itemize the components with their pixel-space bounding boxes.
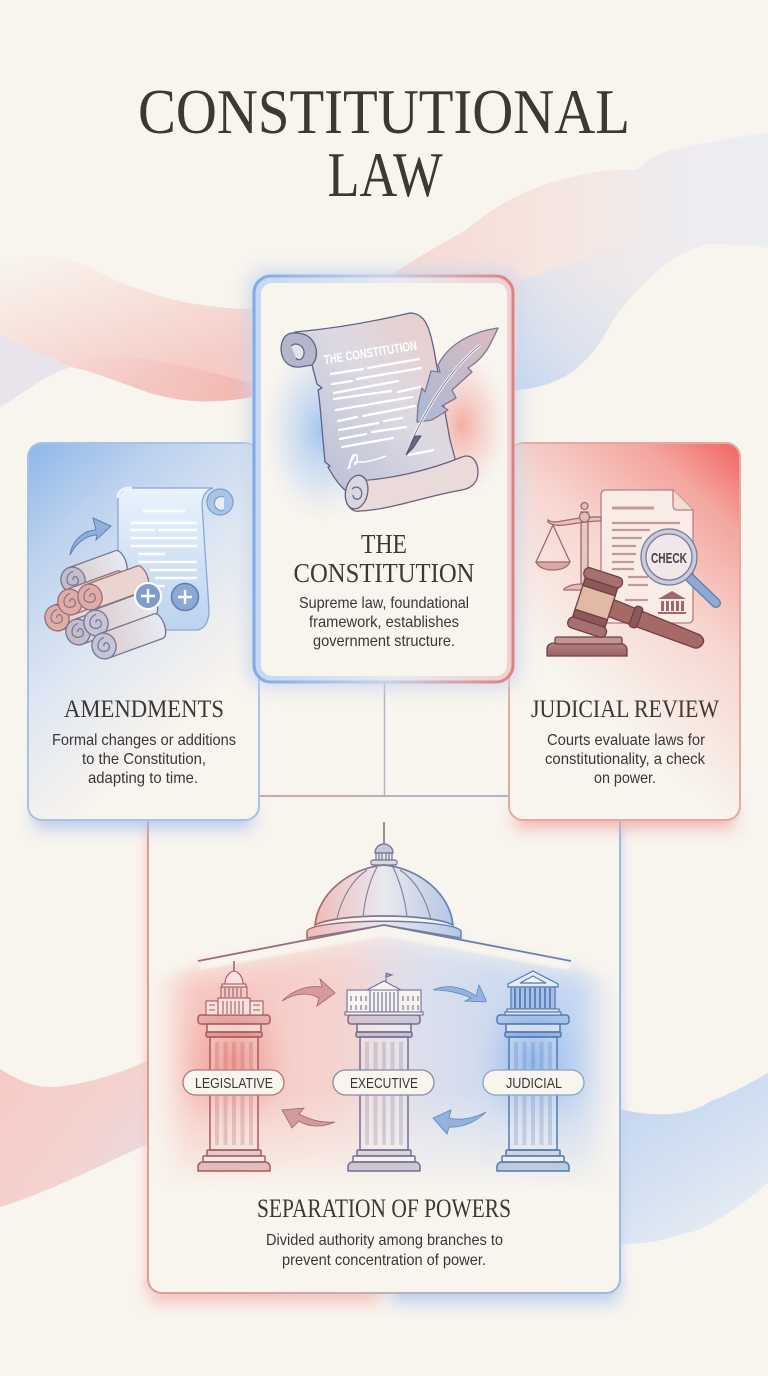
text: constitution description bbox=[299, 595, 469, 650]
icon: constitution scroll bbox=[281, 313, 478, 511]
title: LAW bbox=[328, 140, 443, 210]
label: executive bbox=[333, 1070, 434, 1095]
scroll pile bbox=[41, 549, 169, 662]
text: separation description: Divided authority among branches to bbox=[266, 1232, 503, 1249]
icon: white house bbox=[345, 973, 423, 1015]
icon: bank emblem bbox=[658, 591, 686, 614]
icon: capitol bbox=[206, 961, 263, 1015]
heading: separation of powers: SEPARATION OF POWERS bbox=[257, 1194, 511, 1223]
pillar glows bbox=[162, 936, 610, 1176]
arrow: judicial to executive bbox=[433, 1110, 486, 1134]
panel: judicial review bbox=[509, 443, 740, 828]
text: judicial review description bbox=[545, 732, 706, 787]
icon: scales bbox=[536, 502, 601, 590]
arrow: executive to legislative bbox=[282, 1108, 335, 1128]
icon: dome and roof bbox=[198, 822, 571, 961]
heading: the constitution bbox=[294, 529, 474, 588]
pillar: judicial bbox=[497, 971, 569, 1171]
text: judicial review description: Courts evaluate laws for bbox=[547, 732, 706, 749]
icon: courthouse bbox=[505, 971, 561, 1015]
arrow: executive to judicial bbox=[433, 985, 486, 1002]
label: executive: EXECUTIVE bbox=[350, 1075, 418, 1092]
text: separation description: prevent concentration of power. bbox=[282, 1252, 486, 1269]
text: amendments description: Formal changes or additions bbox=[52, 732, 236, 749]
text: amendments description: to the Constitution, bbox=[82, 751, 206, 768]
text: amendments description: adapting to time. bbox=[88, 770, 198, 787]
pillar: legislative bbox=[198, 961, 270, 1171]
label: judicial: JUDICIAL bbox=[506, 1075, 562, 1092]
connector line bbox=[384, 683, 386, 795]
title: CONSTITUTIONAL bbox=[138, 77, 630, 147]
panel: separation of powers bbox=[140, 790, 628, 1302]
label: judicial bbox=[483, 1070, 584, 1095]
icon: gavel bbox=[547, 566, 704, 656]
icon: curved arrow bbox=[70, 518, 111, 555]
pillar: executive bbox=[345, 973, 423, 1171]
heading: the constitution: CONSTITUTION bbox=[294, 558, 474, 588]
text: constitution description: framework, establishes bbox=[309, 614, 459, 631]
arrow: legislative to executive bbox=[282, 979, 335, 1006]
icon: magnifier bbox=[641, 529, 716, 603]
heading: amendments: AMENDMENTS bbox=[64, 696, 224, 723]
text: constitution description: Supreme law, foundational bbox=[299, 595, 469, 612]
label: legislative bbox=[183, 1070, 284, 1095]
text: separation description bbox=[266, 1232, 503, 1269]
panel: the constitution bbox=[247, 270, 520, 688]
icon: document and scrolls bbox=[41, 488, 233, 662]
text: judicial review description: on power. bbox=[594, 770, 656, 787]
heading: the constitution: THE bbox=[361, 529, 407, 559]
text: constitution description: government structure. bbox=[313, 633, 455, 650]
icon: plus badges bbox=[135, 583, 198, 610]
text: amendments description bbox=[52, 732, 236, 787]
icon: quill bbox=[406, 328, 498, 455]
title bbox=[138, 77, 630, 210]
icon: magnifier: CHECK bbox=[651, 550, 687, 567]
icon: constitution scroll: THE CONSTITUTION bbox=[323, 338, 418, 367]
icon: document bbox=[601, 490, 693, 623]
illustration glow bbox=[273, 366, 499, 508]
heading: judicial review: JUDICIAL REVIEW bbox=[531, 696, 719, 723]
panel: amendments bbox=[28, 443, 259, 828]
label: legislative: LEGISLATIVE bbox=[195, 1075, 273, 1092]
text: judicial review description: constitutionality, a check bbox=[545, 751, 706, 768]
